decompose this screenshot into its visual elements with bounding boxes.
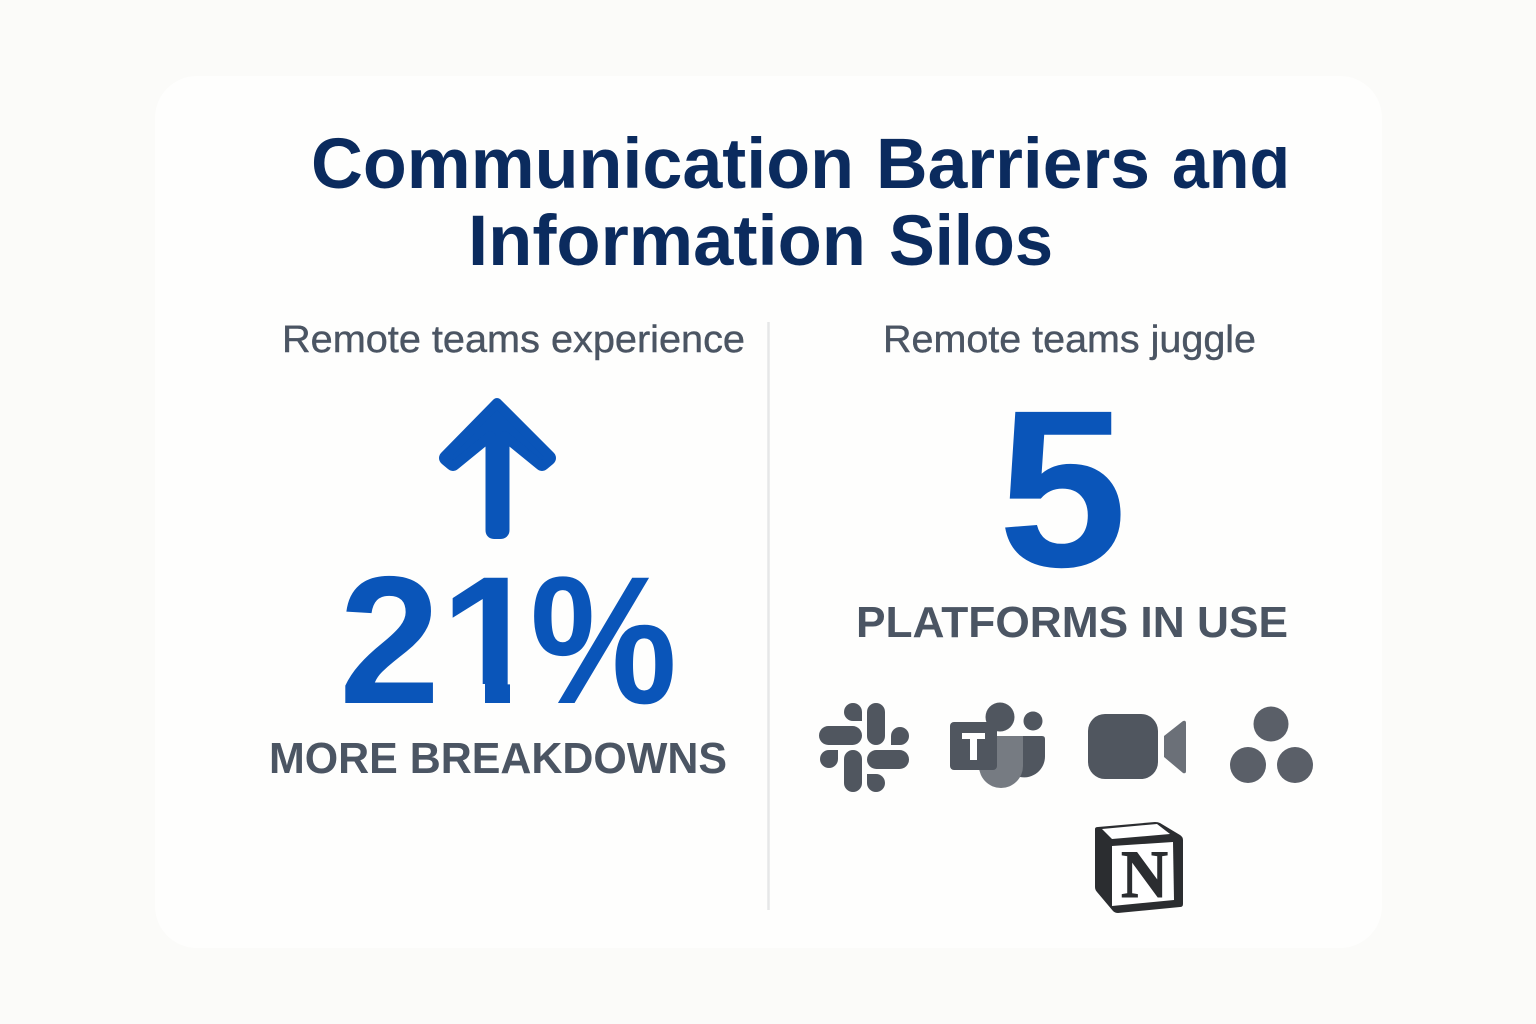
text: left intro: Remote teams experience — [282, 319, 745, 361]
label: more breakdowns: MORE BREAKDOWNS — [269, 734, 727, 783]
stat: 21 percent: 21 — [339, 538, 541, 742]
icon: asana — [1230, 706, 1313, 783]
icon: notion — [1095, 822, 1183, 913]
label: platforms in use: PLATFORMS IN USE — [856, 598, 1288, 647]
title — [314, 136, 1286, 266]
panel: right statistic — [819, 319, 1313, 913]
stat: 5: 5 — [998, 364, 1127, 614]
icon: zoom — [1088, 714, 1186, 779]
icon: teams — [950, 702, 1045, 788]
stat: 21 percent — [345, 576, 673, 704]
title: Barriers — [876, 125, 1150, 204]
panel: main card — [155, 76, 1382, 948]
icon: up arrow — [444, 403, 551, 534]
text: right intro: Remote teams juggle — [883, 319, 1256, 361]
stat: 21 percent: % — [530, 538, 677, 742]
panel: left statistic — [269, 319, 745, 783]
title: Information — [468, 202, 866, 281]
title: Communication — [311, 125, 854, 204]
title: Silos — [889, 202, 1053, 281]
icon: slack — [819, 703, 909, 792]
icon: notion: N — [1121, 836, 1168, 912]
title: and — [1172, 125, 1290, 204]
